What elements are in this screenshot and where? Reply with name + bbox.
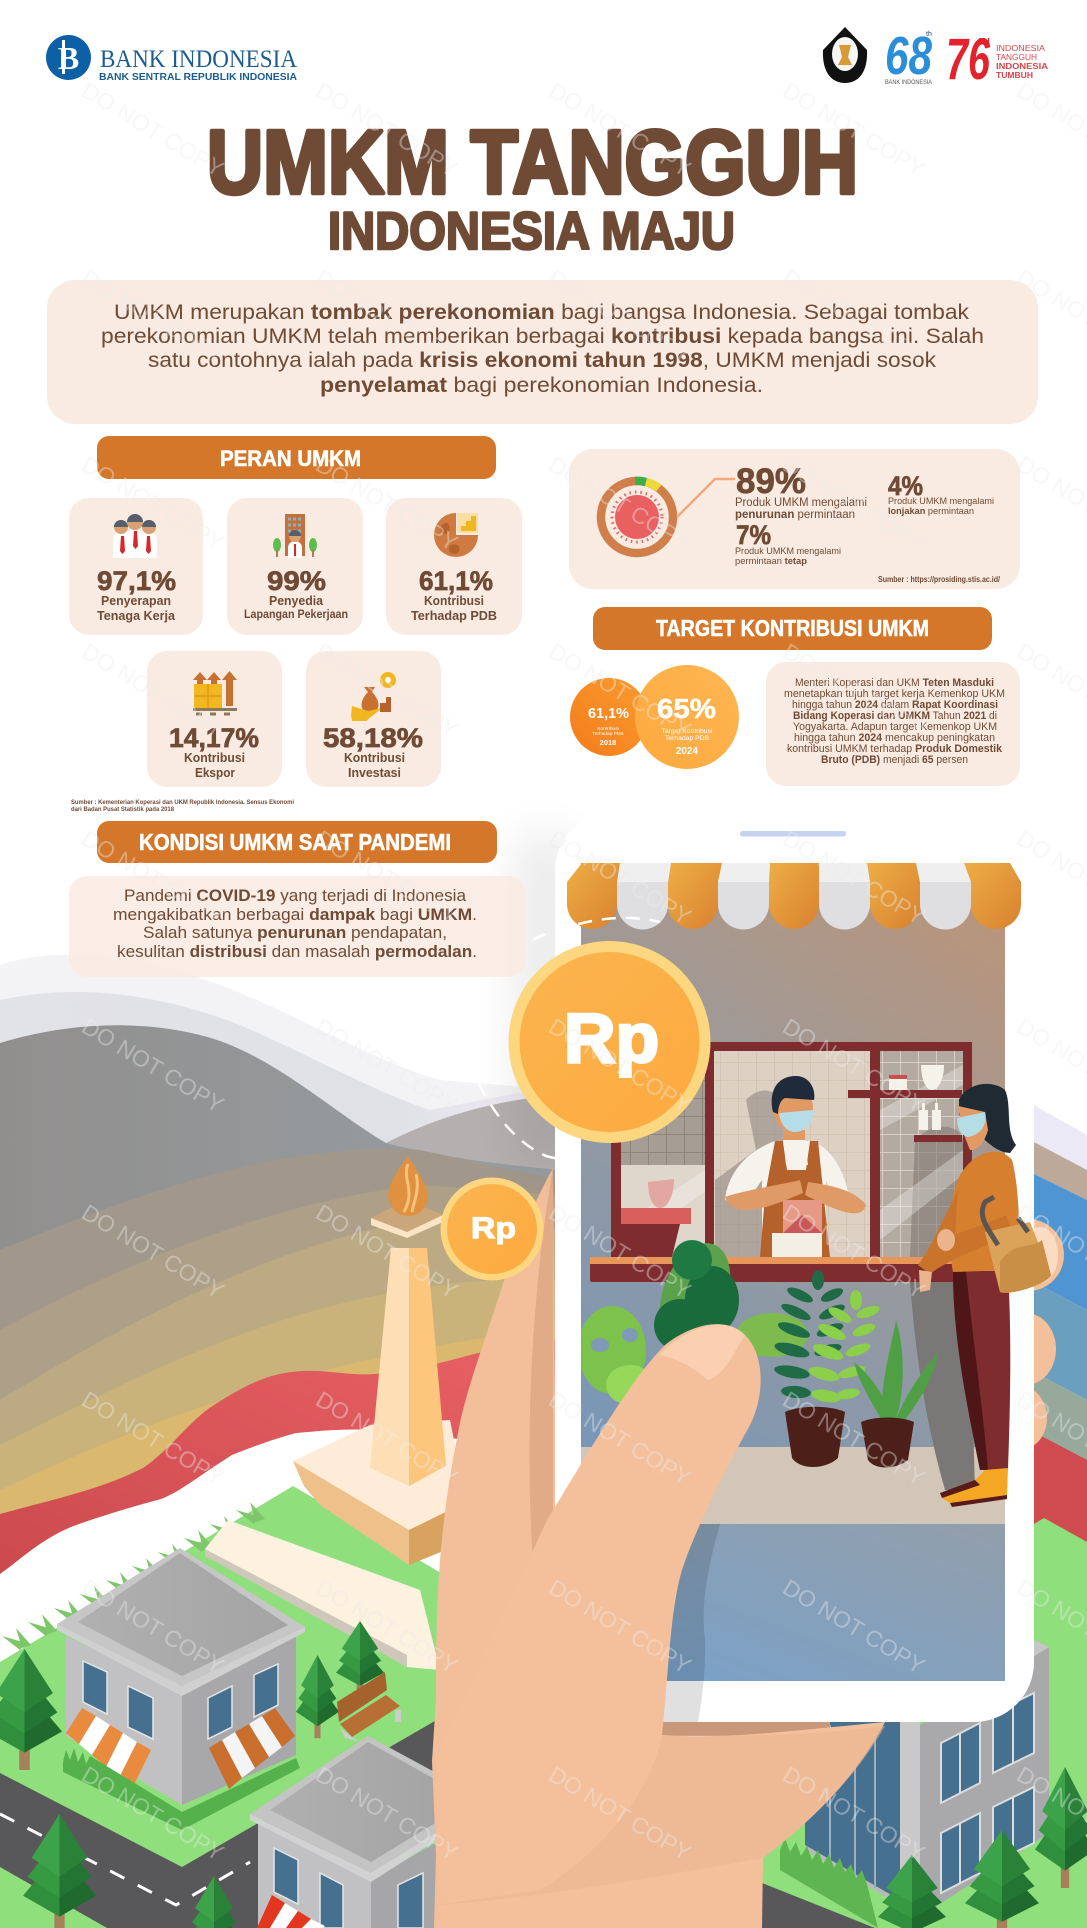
tree [965, 1830, 1039, 1928]
thumb shadow on phone [663, 1524, 720, 1722]
watermark grid: DO NOT COPY [77, 825, 228, 930]
source note [71, 800, 294, 813]
man shopkeeper [725, 1076, 866, 1257]
panel: permintaan produk [569, 449, 1020, 589]
plants [578, 1233, 938, 1468]
awning right [209, 1708, 295, 1789]
building right: tower [805, 1640, 1049, 1917]
title [207, 113, 858, 261]
panel: target kementerian: hingga tahun 2024 mencakup peningkatan [794, 732, 995, 744]
heading: Kondisi UMKM saat pandemi [97, 821, 497, 863]
watermark grid: DO NOT COPY [77, 451, 228, 556]
watermark grid: DO NOT COPY [77, 638, 228, 743]
shelves [848, 1090, 962, 1098]
card: kontribusi PDB: 61,1% [419, 566, 493, 596]
panel: target kementerian [766, 662, 1020, 786]
awning left [66, 1708, 151, 1789]
circle: 65% target 2024: 65% [657, 693, 716, 724]
fern dark [773, 1270, 847, 1399]
watermark grid: DO NOT COPY [544, 1761, 695, 1866]
tree [0, 1649, 62, 1770]
panel: permintaan produk: Produk UMKM mengalami [735, 497, 867, 509]
watermark grid: DO NOT COPY [778, 1199, 929, 1304]
logo: 76th Indonesia: TUMBUH [996, 70, 1033, 80]
icon: money bag and chart [351, 672, 396, 721]
card: kontribusi PDB [386, 498, 522, 635]
shop window [611, 1042, 972, 1262]
watermark grid: DO NOT COPY [77, 264, 228, 369]
circle: 65% target 2024 [635, 665, 739, 769]
ground: green grass [0, 1486, 1087, 1928]
phone screen: shop scene [567, 863, 1051, 1681]
watermark grid: DO NOT COPY [77, 1013, 228, 1118]
tree [296, 1655, 339, 1738]
card: kontribusi PDB: Kontribusi [424, 594, 484, 608]
logo: 76th Indonesia: INDONESIA [996, 43, 1045, 53]
coin: small Rp [440, 1178, 544, 1280]
circle: 65% target 2024: Target Kontribusi [661, 728, 713, 735]
watermark grid: DO NOT COPY [544, 638, 695, 743]
card: kontribusi ekspor: Ekspor [195, 766, 235, 780]
watermark grid: DO NOT COPY [544, 1574, 695, 1679]
coin: large Rp: Rp [564, 999, 659, 1077]
icon: office and worker [273, 514, 317, 558]
watermark grid: DO NOT COPY [544, 1013, 695, 1118]
panel: introduction: UMKM merupakan tombak perekonomian bagi bangsa Indonesia. Sebagai tombak [114, 301, 970, 324]
circle: 65% target 2024: Terhadap PDB [665, 735, 710, 742]
card: kontribusi investasi [306, 651, 441, 787]
watermark grid: DO NOT COPY [77, 1386, 228, 1491]
building 2 [250, 1736, 440, 1928]
tree [189, 1876, 239, 1928]
icon: workers [113, 514, 157, 558]
logo: 76th Indonesia: TH [979, 37, 990, 46]
phone frame [555, 811, 1034, 1722]
panel: kondisi pandemi: Pandemi COVID-19 yang terjadi di Indonesia [124, 887, 467, 905]
panel: target kementerian: hingga tahun 2024 dalam Rapat Koordinasi [792, 699, 998, 711]
watermark grid: DO NOT COPY [311, 1574, 462, 1679]
awning [567, 863, 1021, 930]
watermark grid: DO NOT COPY [77, 1199, 228, 1304]
source note: Sumber : Kementerian Koperasi dan UKM Republik Indonesia. Sensus Ekonomi [71, 800, 294, 806]
card: lapangan pekerjaan: Penyedia [269, 594, 324, 608]
panel: permintaan produk: penurunan permintaan [735, 509, 855, 521]
logo: 76th Indonesia: 76 [946, 27, 991, 92]
watermark grid: DO NOT COPY [544, 77, 695, 182]
watermark grid: DO NOT COPY [544, 1199, 695, 1304]
coin: small Rp: Rp [471, 1212, 516, 1245]
coin: large Rp [508, 941, 710, 1143]
panel: permintaan produk: lonjakan permintaan [888, 506, 974, 517]
panel: kondisi pandemi: mengakibatkan berbagai dampak bagi UMKM. [113, 906, 477, 924]
panel: permintaan produk: 7% [736, 520, 771, 550]
background: wavy hills left [0, 954, 555, 1574]
monstera left [581, 1306, 646, 1403]
panel: introduction: satu contohnya ialah pada krisis ekonomi tahun 1998 , UMKM menjadi sosok [148, 349, 937, 372]
watermark grid: DO NOT COPY [77, 77, 228, 182]
watermark grid: DO NOT COPY [311, 1386, 462, 1491]
windows [83, 1661, 278, 1739]
panel: target kementerian: Menteri Koperasi dan UKM Teten Masduki [795, 677, 994, 689]
source note: dari Badan Pusat Statistik pada 2018 [71, 807, 175, 813]
building 1 [57, 1548, 305, 1830]
watermark grid: DO NOT COPY [311, 451, 462, 556]
tree [23, 1814, 96, 1928]
circle: 65% target 2024: 2024 [676, 746, 699, 757]
panel: target kementerian: Yogyakarta. Adapun target Kemenkop UKM [793, 721, 997, 733]
hand: thumb and palm in front [436, 1324, 885, 1928]
counter [590, 1257, 955, 1282]
circle: 61,1% in 2018 [570, 678, 648, 756]
counter goods [648, 1179, 674, 1208]
interior shadow [715, 1091, 800, 1260]
watermark grid: DO NOT COPY [778, 1386, 929, 1491]
watermark grid: DO NOT COPY [77, 1574, 228, 1679]
panel: kondisi pandemi: kesulitan distribusi dan masalah permodalan. [117, 943, 477, 961]
panel: introduction: perekonomian UMKM telah memberikan berbagai kontribusi kepada bangsa ini. Salah [101, 325, 984, 348]
card: kontribusi investasi: Investasi [348, 766, 401, 780]
logo: Bank Indonesia [46, 35, 297, 83]
background: wavy bands right [1034, 1106, 1087, 1542]
card: tenaga kerja: 97,1% [97, 566, 176, 596]
watermark grid: DO NOT COPY [311, 264, 462, 369]
panel: introduction [47, 280, 1038, 424]
dashed coin path lines [479, 918, 660, 1162]
logo: 68th Bank Indonesia: BANK INDONESIA [885, 80, 932, 86]
card: kontribusi investasi: Kontribusi [344, 751, 405, 765]
card: kontribusi ekspor: Kontribusi [184, 751, 245, 765]
hedge [63, 1748, 300, 1830]
circle: 61,1% in 2018: 2018 [600, 738, 616, 747]
road [0, 1718, 875, 1928]
logo: Bank Indonesia: BANK SENTRAL REPUBLIK INDONESIA [99, 72, 297, 83]
watermark grid: DO NOT COPY [778, 264, 929, 369]
hand: fingers behind phone [432, 1168, 1064, 1928]
bench [337, 1672, 401, 1742]
card: kontribusi ekspor [147, 651, 282, 787]
watermark grid: DO NOT COPY [544, 1386, 695, 1491]
heading: Peran UMKM [97, 436, 496, 479]
floor [581, 1447, 1005, 1524]
watermark grid: DO NOT COPY [77, 1761, 228, 1866]
panel: target kementerian: menetapkan tujuh target kerja Kemenkop UKM [784, 688, 1005, 700]
speaker slot [740, 831, 846, 836]
watermark grid: DO NOT COPY [778, 451, 929, 556]
heading: Target kontribusi UMKM [593, 607, 992, 650]
logo: 76th Indonesia [946, 27, 1048, 92]
fern light [807, 1290, 881, 1405]
lower screen panel [581, 1524, 1005, 1681]
panel: permintaan produk: 89% [736, 462, 806, 501]
watermark grid: DO NOT COPY [778, 1761, 929, 1866]
watermark grid: DO NOT COPY [544, 825, 695, 930]
hedge [780, 1838, 878, 1928]
card: kontribusi PDB: Terhadap PDB [411, 609, 497, 623]
watermark grid: DO NOT COPY [778, 638, 929, 743]
panel: kondisi pandemi [69, 876, 526, 977]
panel: target kementerian: Bruto (PDB) menjadi 65 persen [821, 754, 968, 766]
card: lapangan pekerjaan: 99% [267, 566, 326, 596]
icon: boxes with arrows [193, 671, 237, 714]
panel: permintaan produk: Produk UMKM mengalami [735, 546, 841, 557]
logo: 68th Bank Indonesia: 68 [885, 26, 932, 86]
logo: university crest [823, 27, 867, 83]
heading: Peran UMKM: PERAN UMKM [220, 446, 361, 471]
watermark grid: DO NOT COPY [544, 264, 695, 369]
panel: target kementerian: Bidang Koperasi dan UMKM Tahun 2021 di [793, 710, 997, 722]
wall shadow [910, 1282, 975, 1490]
circle: 61,1% in 2018: 61,1% [588, 705, 629, 722]
card: tenaga kerja [69, 498, 203, 635]
panel: target kementerian: kontribusi UMKM terhadap Produk Domestik [787, 743, 1003, 755]
subtitle: INDONESIA MAJU [328, 202, 735, 261]
watermark grid: DO NOT COPY [778, 825, 929, 930]
spiky plant [854, 1320, 938, 1420]
tree [336, 1621, 384, 1697]
watermark grid: DO NOT COPY [311, 1761, 462, 1866]
card: tenaga kerja: Tenaga Kerja [97, 609, 176, 623]
tree [1035, 1767, 1087, 1888]
watermark grid: DO NOT COPY [311, 77, 462, 182]
woman customer [918, 1084, 1051, 1507]
logo: Bank Indonesia: B [58, 40, 79, 76]
panel: kondisi pandemi: Salah satunya penurunan pendapatan, [143, 924, 447, 942]
heading: Target kontribusi UMKM: TARGET KONTRIBUSI UMKM [656, 615, 929, 641]
logo: 76th Indonesia: TANGGUH [996, 52, 1037, 62]
card: lapangan pekerjaan: Lapangan Pekerjaan [244, 609, 348, 621]
panel: permintaan produk: Produk UMKM mengalami [888, 496, 994, 507]
panel: permintaan produk: 4% [888, 471, 923, 501]
heading: Kondisi UMKM saat pandemi: KONDISI UMKM SAAT PANDEMI [139, 829, 451, 855]
title: UMKM TANGGUH [207, 113, 858, 213]
watermark grid: DO NOT COPY [311, 638, 462, 743]
circle: 61,1% in 2018: Terhadap PDB [592, 731, 624, 737]
watermark grid: DO NOT COPY [544, 451, 695, 556]
watermark grid: DO NOT COPY [778, 1013, 929, 1118]
pots [785, 1407, 845, 1467]
tree [878, 1855, 946, 1928]
card: kontribusi investasi: 58,18% [323, 723, 423, 753]
monstera dark [654, 1240, 739, 1346]
logo: 76th Indonesia: INDONESIA [996, 61, 1048, 71]
watermark grid: DO NOT COPY [311, 825, 462, 930]
card: kontribusi ekspor: 14,17% [169, 723, 259, 753]
awning red [257, 1895, 325, 1928]
watermark grid: DO NOT COPY [311, 1199, 462, 1304]
watermark grid: DO NOT COPY [778, 77, 929, 182]
icon: pie chart [434, 513, 478, 557]
logo: Bank Indonesia: BANK INDONESIA [100, 46, 297, 73]
watermark grid: DO NOT COPY [311, 1013, 462, 1118]
panel: permintaan produk: Sumber : https://prosiding.stis.ac.id/ [878, 574, 1001, 584]
phone shadow [515, 830, 575, 1170]
card: lapangan pekerjaan [227, 498, 363, 635]
card: tenaga kerja: Penyerapan [101, 594, 171, 608]
panel: introduction: penyelamat bagi perekonomian Indonesia. [320, 374, 763, 397]
circle: 61,1% in 2018: Kontribusi [597, 726, 619, 732]
logo: 68th Bank Indonesia: th [926, 31, 932, 38]
panel: permintaan produk: permintaan tetap [735, 556, 807, 567]
monument [205, 1156, 470, 1670]
donut chart with virus [601, 479, 735, 553]
watermark grid: DO NOT COPY [778, 1574, 929, 1679]
